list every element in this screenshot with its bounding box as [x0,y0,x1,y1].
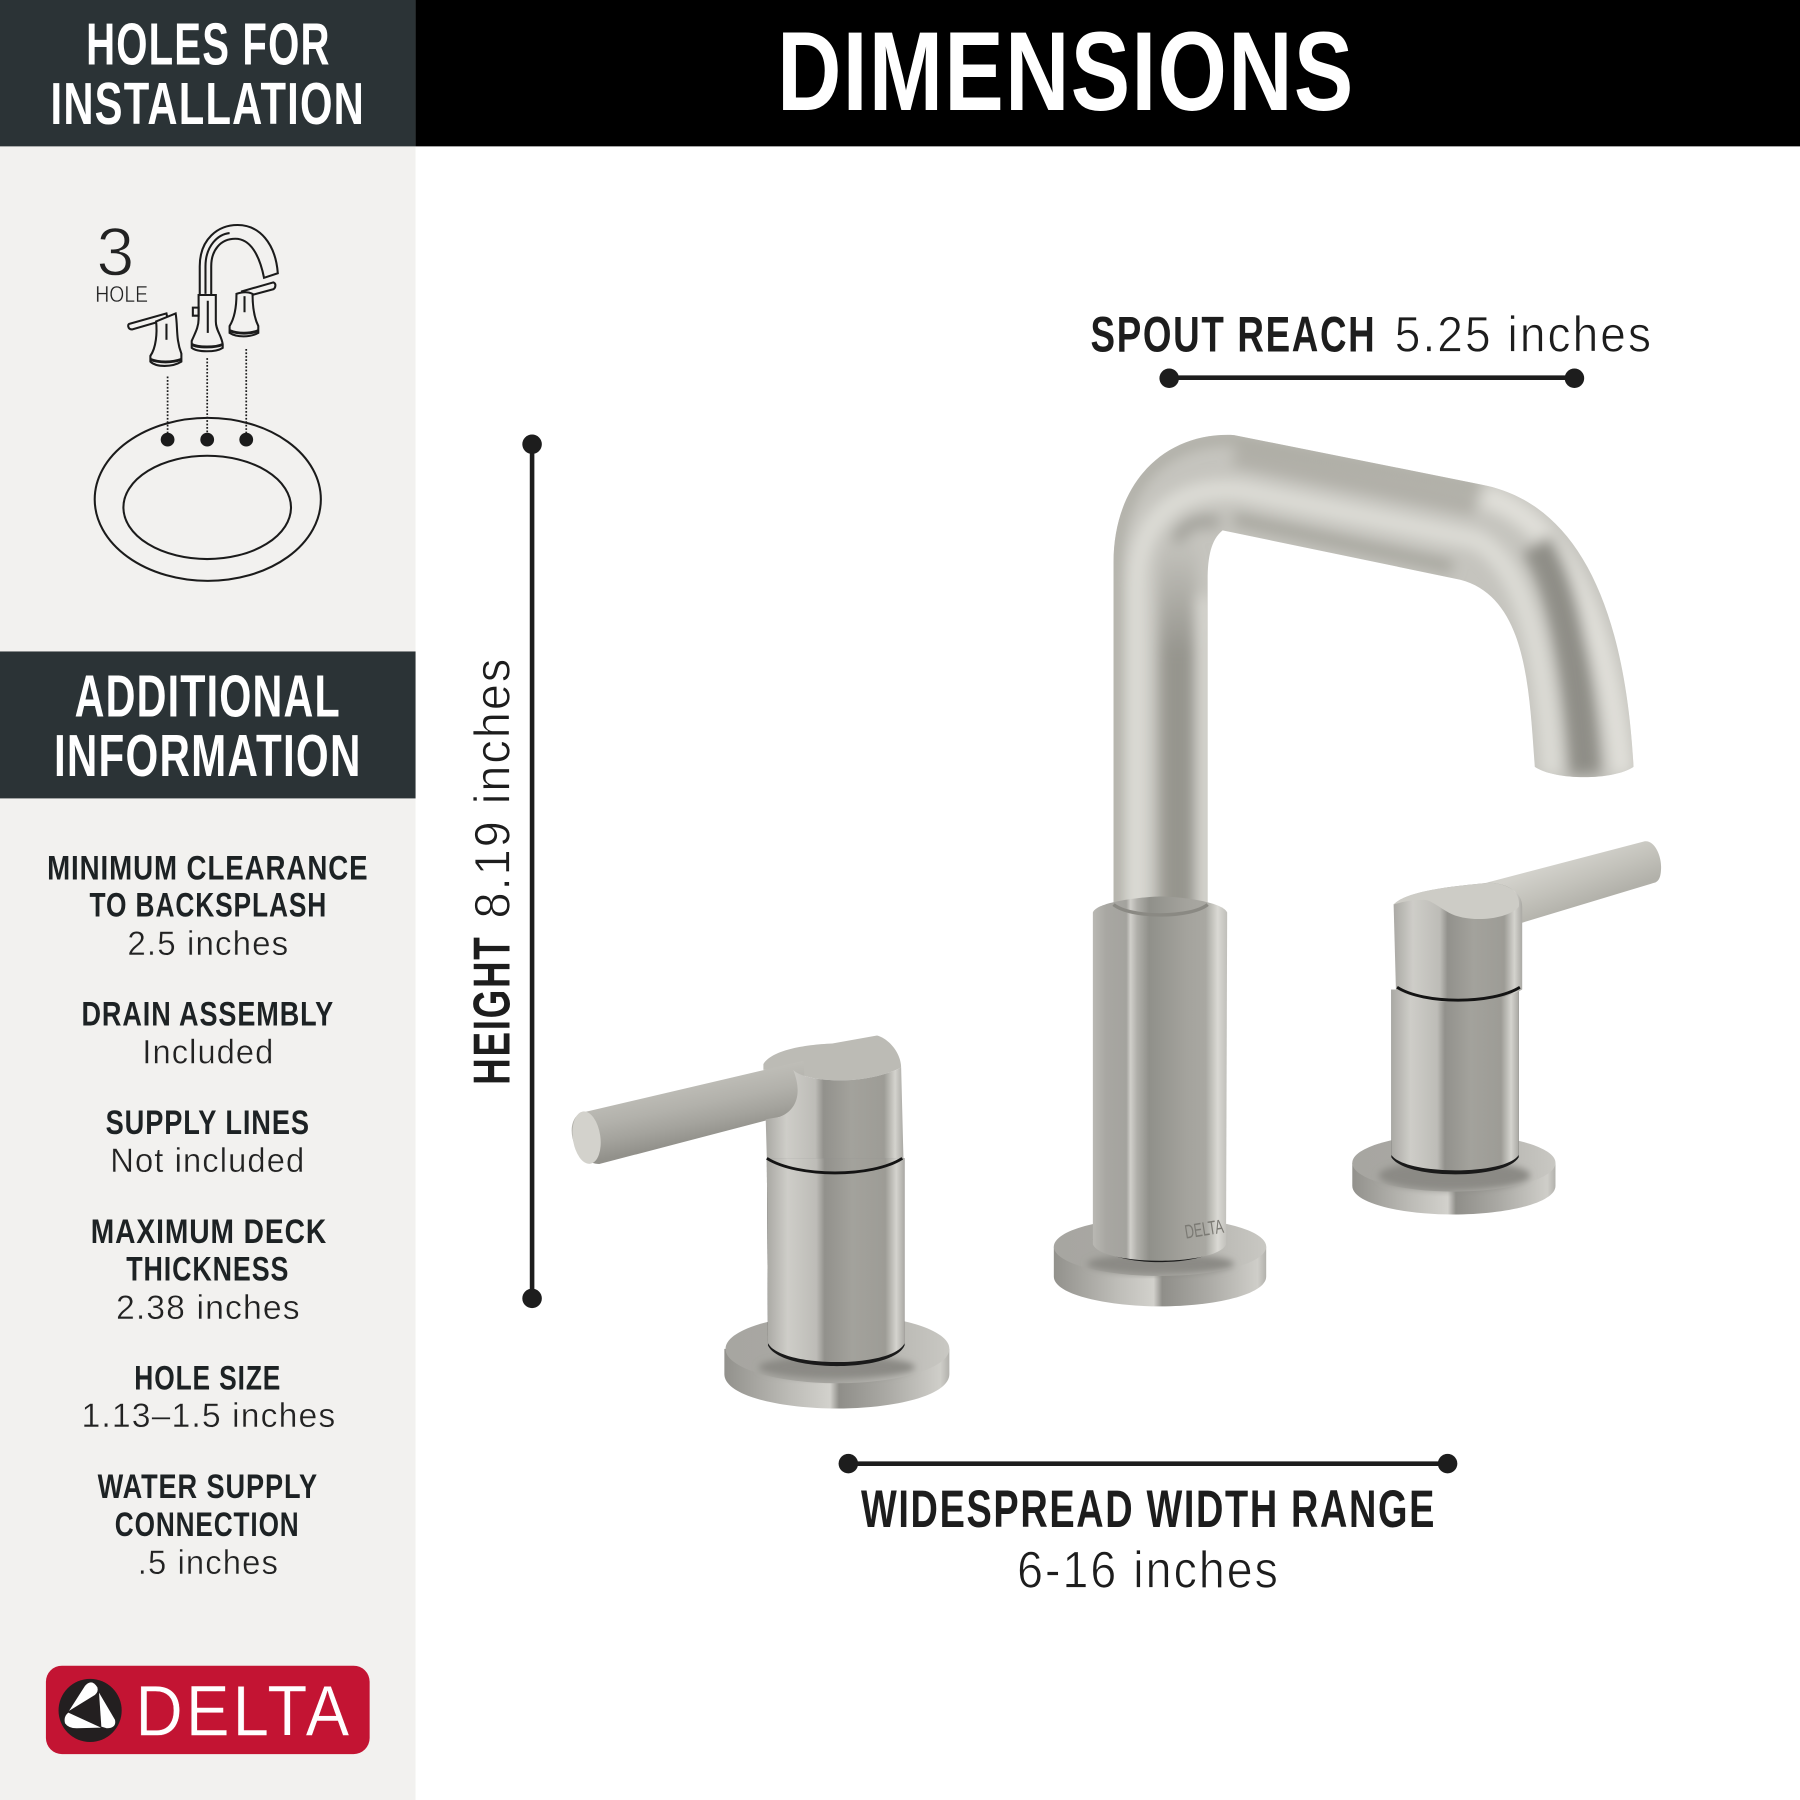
spec: hole size [82,1360,336,1435]
dimension: widespread width range: WIDESPREAD WIDTH RANGE [861,1480,1436,1539]
engraved logo text: DELTA [1183,1216,1225,1244]
spec: drain assembly: DRAIN ASSEMBLY [82,996,334,1034]
text block: additional information list [47,849,368,1582]
panel: sidebar background [0,0,416,1800]
dimension: spout reach [1091,305,1653,388]
spec: supply lines: Not included [110,1142,305,1180]
spec: maximum deck thickness: MAXIMUM DECK [91,1213,327,1251]
header: dimensions title [416,0,1800,146]
icon: mini right handle [230,282,275,336]
spec: maximum deck thickness: 2.38 inches [116,1289,301,1327]
label: 3 hole: HOLE [95,281,148,307]
title: DIMENSIONS [777,8,1355,134]
spec: water supply connection: .5 inches [138,1544,279,1582]
heading: additional information: INFORMATION [54,722,362,789]
icon: three hole faucet and basin illustration [95,214,321,581]
dimension: widespread width range [839,1454,1457,1599]
logo: delta [46,1666,370,1754]
label: 3 hole [95,214,148,307]
spec: maximum deck thickness: THICKNESS [126,1251,289,1289]
product photo: faucet [569,425,1661,1409]
heading: holes for installation: HOLES FOR [86,10,331,77]
dimension: spout reach: 5.25 inches [1395,305,1653,362]
dimension: spout reach: SPOUT REACH [1091,305,1376,362]
icon: dotted guide lines [168,349,246,434]
icon: mini left handle [128,313,181,366]
spec: water supply connection [98,1468,318,1582]
faucet: centre body [1054,897,1266,1306]
spec: water supply connection: WATER SUPPLY [98,1468,318,1506]
spec: supply lines: SUPPLY LINES [106,1104,310,1142]
spec: hole size: 1.13–1.5 inches [82,1397,336,1435]
faucet: right handle [1352,841,1661,1215]
header: holes for installation [0,0,416,146]
spec: water supply connection: CONNECTION [115,1506,300,1544]
icon: delta logo mark [65,1682,115,1728]
spec: minimum clearance [47,849,368,963]
header: additional information [0,651,416,798]
spec: maximum deck thickness [91,1213,327,1327]
faucet: left handle [569,1035,949,1409]
dimension: height [463,435,542,1308]
spec: supply lines [106,1104,310,1180]
faucet: spout [1114,434,1634,902]
spec: drain assembly: Included [142,1034,274,1072]
dimension: height: 8.19 inches [464,657,521,918]
dimension: widespread width range: 6-16 inches [1017,1541,1280,1599]
spec: drain assembly [82,996,334,1072]
spec: minimum clearance: 2.5 inches [127,925,289,963]
spec: minimum clearance: TO BACKSPLASH [90,887,327,925]
icon: mini spout [192,225,278,351]
heading: holes for installation [51,10,365,137]
heading: additional information [54,662,362,789]
wordmark: DELTA [135,1673,352,1752]
dimension: height: HEIGHT [463,936,521,1085]
spec: minimum clearance: MINIMUM CLEARANCE [47,849,368,887]
heading: additional information: ADDITIONAL [75,662,341,729]
label: 3 hole: 3 [96,214,134,291]
heading: holes for installation: INSTALLATION [51,70,365,137]
icon: basin [95,418,321,581]
spec: hole size: HOLE SIZE [134,1360,281,1398]
